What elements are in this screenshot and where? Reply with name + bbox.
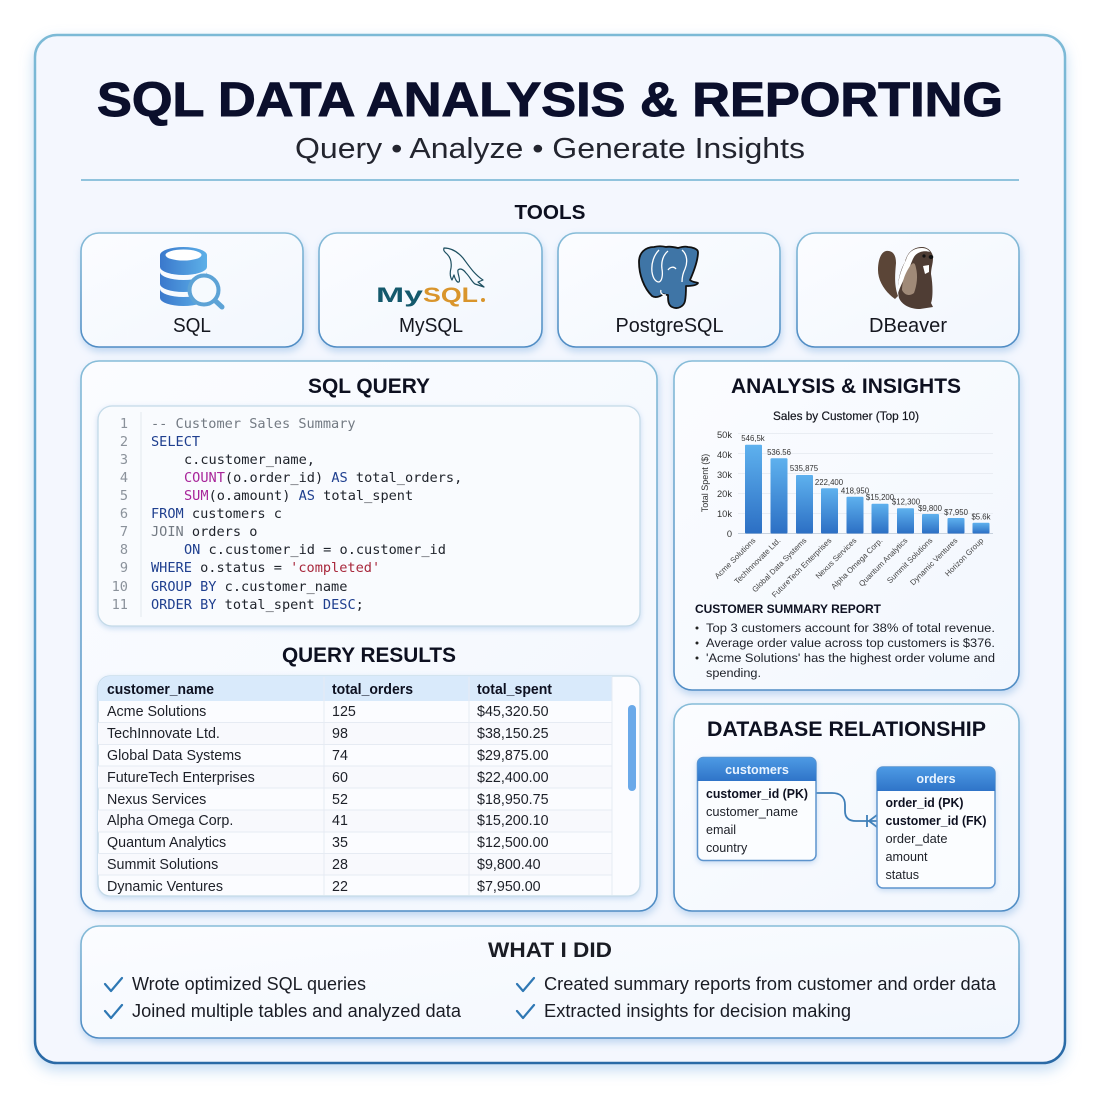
bar chart: sales by customer: 535,875 [790, 464, 819, 473]
heading: tools: TOOLS [514, 201, 586, 224]
table: orders: status [886, 868, 919, 882]
icon: MySQL dolphin logo: SQL [423, 284, 478, 307]
bar chart: sales by customer: 10k [717, 509, 732, 519]
icon: PostgreSQL elephant [639, 246, 698, 308]
table: customers: customers [725, 763, 789, 777]
results table [98, 676, 640, 896]
table: orders: order_date [886, 832, 948, 846]
code editor: 2 [120, 434, 128, 450]
code editor: SELECT [151, 434, 200, 450]
customer summary report: 'Acme Solutions' has the highest order volume and [706, 651, 995, 665]
accomplishment list [132, 973, 997, 1021]
code editor: 4 [120, 470, 128, 486]
bar chart: sales by customer: Total Spent ($) [700, 454, 710, 512]
heading: what I did: WHAT I DID [488, 939, 612, 962]
label: DBeaver [869, 315, 947, 337]
results table: FutureTech Enterprises [107, 770, 255, 786]
bar chart: sales by customer: 20k [717, 489, 732, 499]
bar chart: sales by customer: 30k [717, 470, 732, 480]
results table: TechInnovate Ltd. [107, 726, 220, 742]
results table: $29,875.00 [477, 748, 549, 764]
code editor [98, 406, 640, 626]
code editor: SUM(o.amount) AS total_spent [184, 488, 413, 504]
code editor: GROUP BY c.customer_name [151, 579, 347, 595]
bar chart: sales by customer: Horizon Group [943, 536, 986, 578]
panel: SQL query and results [81, 361, 657, 911]
code editor: c.customer_name, [184, 452, 315, 468]
customer summary report: Top 3 customers account for 38% of total revenue. [706, 621, 995, 635]
results table: $22,400.00 [477, 770, 549, 786]
bar chart: sales by customer: Quantum Analytics [857, 536, 909, 588]
results table: $15,200.10 [477, 813, 549, 829]
bar chart: sales by customer: 418,950 [841, 486, 870, 496]
customer summary report: spending. [706, 666, 761, 680]
bar chart: sales by customer: 536.56 [767, 448, 791, 457]
tool card: SQL [81, 233, 303, 347]
icon: MySQL dolphin logo: My [376, 284, 423, 307]
heading: database relationship: DATABASE RELATIONSHIP [707, 717, 986, 741]
tool card: MySQL [319, 233, 542, 347]
bar chart: sales by customer: Global Data Systems [750, 536, 808, 594]
results table: 60 [332, 770, 348, 786]
code editor: 5 [120, 488, 128, 504]
bar chart: sales by customer: 222,400 [815, 478, 844, 487]
bar chart: sales by customer: $9,800 [918, 504, 943, 513]
code editor: 9 [120, 560, 128, 576]
results table: 98 [332, 726, 348, 742]
bar chart: sales by customer: FutureTech Enterprises [770, 536, 833, 599]
tool card: PostgreSQL [558, 233, 780, 347]
table: orders [877, 767, 995, 888]
bar chart: sales by customer: Dynamic Ventures [908, 536, 959, 587]
bar chart: sales by customer: $15,200 [866, 493, 895, 502]
panel: database relationship [674, 704, 1019, 911]
code editor: ON c.customer_id = o.customer_id [184, 542, 446, 558]
bar chart: sales by customer: Sales by Customer (Top 10) [773, 409, 919, 423]
table: orders: customer_id (FK) [886, 814, 986, 828]
icon: DBeaver beaver [878, 247, 933, 309]
results table: $18,950.75 [477, 792, 549, 808]
results table: Dynamic Ventures [107, 879, 223, 895]
code editor: WHERE o.status = 'completed' [151, 560, 380, 576]
results table: 28 [332, 857, 348, 873]
results table: Quantum Analytics [107, 835, 226, 851]
accomplishment list: Created summary reports from customer and order data [544, 973, 997, 994]
results table: total_spent [477, 682, 552, 698]
results table: total_orders [332, 682, 413, 698]
customer summary report [695, 602, 995, 680]
bar chart: sales by customer: 546,5k [741, 434, 765, 443]
code editor: 8 [120, 542, 128, 558]
heading: analysis and insights: ANALYSIS & INSIGHTS [731, 375, 961, 398]
code editor: 1 [120, 416, 128, 432]
bar chart: sales by customer: $12,300 [892, 498, 921, 506]
panel: what I did [81, 926, 1019, 1038]
results table: 41 [332, 813, 348, 829]
icon: check marks [105, 978, 534, 1018]
bar chart: sales by customer: $5.6k [971, 512, 991, 522]
table: customers: customer_id (PK) [706, 787, 808, 801]
accomplishment list: Joined multiple tables and analyzed data [132, 1000, 462, 1021]
connector: one-to-many relationship [816, 793, 877, 827]
code editor: 10 [112, 579, 128, 595]
bar chart: sales by customer: 40k [717, 450, 732, 460]
bar chart: sales by customer: 50k [717, 430, 732, 440]
table: orders: amount [886, 850, 928, 864]
label: MySQL [399, 315, 463, 337]
code editor: 6 [120, 506, 128, 522]
results table: $12,500.00 [477, 835, 549, 851]
results table: 74 [332, 748, 348, 764]
tool card: DBeaver [797, 233, 1019, 347]
results table: $45,320.50 [477, 704, 549, 720]
table: customers: country [706, 841, 748, 855]
customer summary report: Average order value across top customers is $376. [706, 636, 995, 650]
results table: Alpha Omega Corp. [107, 813, 233, 829]
results table: $38,150.25 [477, 726, 549, 742]
bar chart: sales by customer: TechInnovate Ltd. [733, 536, 782, 586]
title: SQL DATA ANALYSIS & REPORTING [97, 74, 1003, 127]
bar chart: sales by customer: Nexus Services [814, 536, 858, 581]
accomplishment list: Extracted insights for decision making [544, 1000, 851, 1021]
bar chart: sales by customer: Summit Solutions [885, 536, 934, 585]
results table: $7,950.00 [477, 879, 541, 895]
code editor: 11 [112, 597, 128, 613]
results table: Nexus Services [107, 792, 206, 808]
icon: MySQL dolphin logo [376, 248, 485, 307]
code editor: 7 [120, 524, 128, 540]
bar chart: sales by customer: Alpha Omega Corp. [829, 536, 884, 591]
bar chart: sales by customer: 0 [727, 529, 732, 539]
results table: Summit Solutions [107, 857, 218, 873]
code editor: FROM customers c [151, 506, 282, 522]
table: customers: customer_name [706, 805, 798, 819]
bar chart: sales by customer: Acme Solutions [713, 536, 757, 581]
code editor: ORDER BY total_spent DESC; [151, 597, 364, 613]
scrollbar [628, 705, 636, 791]
results table: customer_name [107, 682, 214, 698]
table: orders: orders [916, 772, 956, 786]
results table: Global Data Systems [107, 748, 241, 764]
code editor: JOIN orders o [151, 524, 257, 540]
code editor: -- Customer Sales Summary [151, 416, 356, 432]
code editor: 3 [120, 452, 128, 468]
accomplishment list: Wrote optimized SQL queries [132, 973, 366, 994]
results table: 35 [332, 835, 348, 851]
label: SQL [173, 315, 211, 337]
icon: database with magnifier [160, 247, 222, 307]
results table: Acme Solutions [107, 704, 206, 720]
table: orders: order_id (PK) [886, 796, 964, 810]
label: PostgreSQL [616, 315, 724, 337]
bar chart: sales by customer: $7,950 [944, 508, 969, 517]
results table: 52 [332, 792, 348, 808]
subtitle: Query • Analyze • Generate Insights [295, 133, 805, 165]
code editor: COUNT(o.order_id) AS total_orders, [184, 470, 462, 486]
bar chart: sales by customer [700, 409, 993, 599]
customer summary report: CUSTOMER SUMMARY REPORT [695, 602, 881, 616]
table: customers: email [706, 823, 736, 837]
panel: analysis and insights [674, 361, 1019, 690]
table: customers [698, 758, 816, 860]
results table: 125 [332, 704, 356, 720]
heading: query results: QUERY RESULTS [282, 644, 456, 667]
results table: $9,800.40 [477, 857, 541, 873]
heading: SQL query: SQL QUERY [308, 375, 430, 398]
results table: 22 [332, 879, 348, 895]
